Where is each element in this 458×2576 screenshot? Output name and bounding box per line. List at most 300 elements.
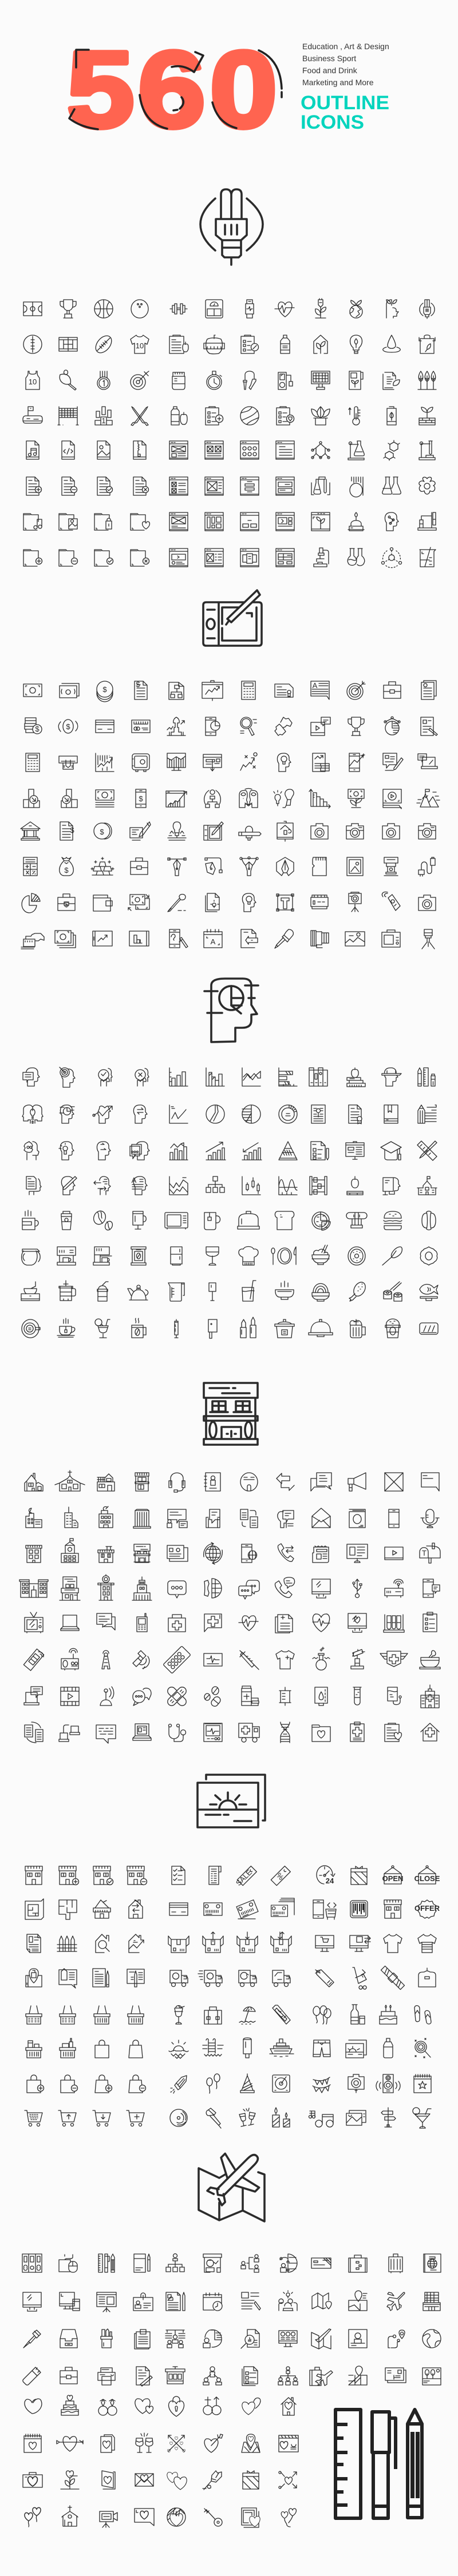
icon: open sign: OPEN — [382, 1874, 403, 1883]
icon: bowling ball — [131, 300, 148, 318]
icon: monitor chart — [167, 753, 185, 770]
icon: microscope — [314, 548, 329, 567]
icon: head network — [385, 512, 398, 531]
icon: document swap — [240, 1509, 258, 1528]
icon: soup bowl — [275, 1281, 294, 1299]
icon: text chat — [96, 1725, 116, 1743]
icon: credit card — [96, 720, 114, 733]
icon: org doc — [169, 682, 184, 699]
icon: luggage — [389, 2254, 402, 2273]
icon: clock school — [61, 1539, 78, 1563]
icon: doc cross — [133, 477, 149, 495]
icon: pen tool bezier — [240, 857, 258, 876]
icon: shop plus — [59, 1866, 79, 1885]
icon: stopwatch — [207, 371, 222, 389]
icon: head pencil — [382, 1068, 401, 1086]
icon: eco battery — [387, 407, 396, 425]
icon: heart pulse — [275, 302, 294, 317]
icon: head swap — [133, 1105, 147, 1123]
icon: kettle — [128, 1285, 148, 1300]
icon: lollipop — [415, 2038, 431, 2058]
icon: golf flag — [23, 407, 42, 423]
icon: flask — [313, 1647, 330, 1670]
icon: pyramid — [279, 1142, 297, 1160]
icon: suitcase plane — [310, 2367, 333, 2386]
icon: doc pen — [421, 717, 437, 736]
icon: magnifier — [240, 717, 256, 736]
icon: champagne glasses — [136, 2433, 153, 2452]
icon: beaker — [420, 547, 436, 567]
icon: scatter chart — [96, 753, 114, 772]
icon: pie nodes — [384, 717, 400, 735]
icon: test tube — [353, 1687, 361, 1705]
icon: podium — [95, 407, 112, 425]
icon: documents cycle — [25, 1722, 43, 1743]
icon: hotel — [423, 2292, 440, 2311]
icon: ping pong — [60, 370, 76, 390]
icon: wallet — [93, 895, 112, 911]
icon: binders — [22, 2254, 42, 2272]
icon: satellite — [133, 1651, 149, 1669]
icon: mortar — [420, 1651, 440, 1669]
icon: doc seal — [349, 1105, 362, 1124]
icon: team board — [165, 2330, 185, 2348]
icon: route — [388, 2330, 405, 2348]
icon: house — [25, 1473, 43, 1491]
icon: chat pen — [383, 753, 403, 770]
icon: trees — [418, 371, 436, 389]
icon: wine bottle — [351, 2005, 365, 2024]
outline icons heading: ICONS — [301, 112, 364, 133]
icon: head chat dots — [130, 1142, 149, 1160]
icon: document list — [242, 2367, 258, 2386]
icon: bars up — [23, 789, 40, 808]
icon: field — [23, 302, 42, 316]
icon: dolly — [353, 1967, 366, 1989]
icon: folder minus — [59, 550, 78, 566]
icon: pencil and ruler — [418, 1068, 435, 1086]
icon: percent tag: % — [275, 1871, 286, 1882]
icon: bars arrow up — [206, 1142, 226, 1160]
icon: router — [385, 1579, 403, 1597]
hero icon: shop building — [204, 1383, 258, 1445]
icon: iv cylinder — [279, 1687, 291, 1706]
black accent strokes on number — [69, 50, 282, 129]
icon: contract pen — [93, 1969, 109, 1987]
icon: web download — [203, 754, 222, 771]
icon: receipt — [209, 1866, 221, 1885]
icon: address book — [204, 1473, 220, 1491]
icon: jersey 10 — [131, 335, 149, 353]
icon: basket — [128, 2006, 144, 2024]
icon: syringe — [240, 1651, 259, 1669]
icon: eco device — [349, 371, 363, 389]
icon: document search — [241, 2329, 259, 2348]
icon: heart clipboard — [385, 1723, 401, 1742]
icon: drinks basket — [60, 2038, 76, 2058]
icon: two chats — [239, 1580, 259, 1599]
icon: clipboard shield — [277, 407, 294, 425]
icon: sauce bottles — [240, 1317, 256, 1338]
icon: cards — [271, 1898, 294, 1917]
icon: tea cup — [57, 1318, 75, 1337]
icon: line chart — [242, 1068, 260, 1086]
icon: wireframe — [205, 548, 223, 567]
icon: close sign — [414, 1866, 440, 1884]
icon: vinyl record — [170, 2109, 187, 2126]
icon: bottle — [281, 335, 290, 353]
icon: balloons — [313, 2006, 331, 2024]
icon: shop — [25, 1866, 42, 1885]
icon: board pen — [127, 1969, 144, 1987]
icon: love location — [242, 2434, 260, 2452]
icon: briefcase — [60, 2367, 77, 2384]
icon: signpost — [381, 2108, 396, 2127]
icon: thermometer — [349, 407, 360, 425]
icon: football — [93, 333, 114, 356]
icon: wireframe text — [276, 441, 294, 459]
icon: love chat — [135, 2509, 154, 2526]
icon: chicken leg — [349, 1280, 368, 1301]
icon: chess — [167, 717, 185, 736]
icon: certificate — [275, 684, 293, 697]
icon: falling apple — [350, 477, 363, 497]
icon: calculator — [242, 681, 255, 699]
icon: wireframe — [276, 512, 294, 531]
panel: business, design and photography icons — [21, 680, 440, 949]
icon: hospital — [421, 1685, 439, 1708]
icon: photos — [346, 2040, 366, 2058]
icon: invoice: $ — [70, 826, 74, 834]
icon: bridged flasks — [311, 477, 330, 495]
outline icons heading: OUTLINE — [301, 92, 389, 114]
icon: book — [384, 1105, 398, 1123]
icon: house growth — [129, 1934, 144, 1953]
icon: store — [384, 1900, 401, 1918]
icon: abacus — [310, 1176, 327, 1195]
icon: trophy — [60, 300, 76, 318]
icon: radio — [61, 1648, 78, 1670]
icon: easel — [277, 821, 293, 841]
icon: id badge — [133, 2293, 153, 2311]
icon: fish — [420, 1284, 438, 1301]
icon: offer badge — [414, 1900, 440, 1918]
icon: wireframe — [169, 441, 188, 459]
icon: dropper — [275, 929, 293, 948]
icon: basket — [26, 2006, 42, 2024]
panel: office and travel icons — [22, 2253, 441, 2527]
icon: hearts — [135, 2399, 153, 2414]
icon: landscape photo — [423, 2368, 441, 2385]
icon: monitor — [23, 2292, 41, 2311]
icon: sunset — [169, 2040, 188, 2058]
icon: monitor heart — [348, 1613, 366, 1632]
icon: flower — [419, 477, 435, 494]
icon: doc arrow — [241, 929, 258, 948]
icon: microscope — [351, 1649, 365, 1669]
icon: monitor cart — [315, 1935, 334, 1951]
icon: head board — [383, 1178, 400, 1195]
icon: wine glass — [206, 1247, 219, 1265]
icon: wireframe — [169, 548, 188, 567]
panel: marketing, charts, education and food icons — [21, 1067, 438, 1338]
icon: stat bars — [206, 1068, 224, 1086]
icon: clipboard — [423, 1612, 437, 1632]
icon: megaphone — [348, 1473, 366, 1491]
icon: skipping rope — [243, 371, 256, 389]
icon: tube stand — [419, 441, 435, 460]
icon: phone globe — [204, 1579, 222, 1598]
icon: wireframe — [240, 548, 259, 567]
icon: empire building — [132, 1577, 152, 1600]
icon: wedding rings — [98, 2399, 117, 2415]
icon: sale tag: SALE — [234, 1868, 254, 1887]
icon: money bag: $ — [64, 866, 69, 874]
icon: heart arrows — [279, 2471, 297, 2488]
pencil inner bars — [410, 2432, 420, 2498]
icon: cocktail — [175, 2005, 184, 2024]
icon: dish building — [26, 1508, 42, 1528]
icon: chat circles — [133, 1688, 151, 1706]
icon: bag minus — [61, 2075, 78, 2093]
icon: pie chart — [206, 1105, 224, 1123]
icon: ambulance — [239, 1723, 259, 1742]
category list: Business Sport — [302, 54, 356, 63]
icon: iv drip — [388, 1687, 401, 1705]
icon: chef hat — [239, 1247, 258, 1265]
icon: offer badge: OFFER — [414, 1904, 440, 1913]
icon: coffee grinder — [21, 1282, 40, 1301]
icon: storefront — [134, 1544, 150, 1563]
icon: portrait — [349, 2329, 367, 2348]
icon: sprout — [419, 407, 435, 425]
icon: scale — [206, 300, 223, 318]
icon: coin stack — [25, 718, 42, 734]
icon: two heads bulb — [22, 1105, 43, 1123]
icon: dollar cycle: $ — [66, 722, 70, 731]
icon: calendar clock — [203, 2293, 222, 2311]
icon: winged cross — [380, 1651, 408, 1667]
icon: cart plus — [127, 2110, 144, 2126]
icon: sd card — [313, 857, 326, 876]
icon: heart plant — [61, 2471, 79, 2489]
icon: devices — [60, 2292, 80, 2311]
icon: cart up — [58, 2110, 76, 2126]
icon: credit card — [169, 1903, 188, 1915]
icon: dashboard monitor — [279, 2331, 297, 2347]
icon: globe — [204, 1543, 222, 1564]
icon: bulb — [350, 335, 362, 353]
icon: bars arrow down — [242, 1143, 262, 1160]
icon: wireframe — [169, 477, 188, 495]
icon: round flasks — [348, 548, 365, 566]
icon: head message — [278, 1510, 294, 1528]
icon: plant plug — [315, 299, 326, 318]
icon: laptop chat — [24, 1687, 42, 1705]
icon: gender symbols — [203, 2397, 221, 2415]
icon: target darts — [131, 371, 149, 389]
icon: burger — [384, 1211, 402, 1230]
icon: radio tower — [102, 1651, 110, 1669]
icon: phone chat — [423, 1579, 440, 1597]
icon: shop check — [93, 1866, 113, 1885]
icon: monitor — [312, 1579, 330, 1598]
icon: pencil cup — [101, 2329, 112, 2348]
icon: globe heart — [167, 2508, 185, 2526]
hero icon: head with pie chart — [204, 979, 258, 1042]
icon: box up down — [271, 1932, 291, 1953]
icon: flask stand — [348, 441, 364, 460]
icon: usb stick — [23, 2367, 41, 2385]
icon: donut — [348, 1247, 365, 1265]
icon: basketball — [94, 300, 113, 318]
icon: steaming cup — [22, 1210, 38, 1230]
icon: balloons — [281, 2509, 296, 2527]
icon: medicine — [242, 1686, 259, 1706]
icon: books — [309, 1068, 327, 1086]
icon: medical doc — [275, 1615, 293, 1633]
icon: cake — [380, 2005, 397, 2024]
icon: apartments — [19, 1580, 48, 1597]
icon: rugby ball — [23, 335, 42, 353]
icon: heart house — [281, 2398, 296, 2415]
icon: doc gear — [206, 893, 219, 912]
icon: doc check — [97, 477, 112, 495]
icon: head gear — [24, 1142, 39, 1160]
icon: eco bag — [419, 335, 435, 353]
icon: monitor exchange — [350, 1935, 370, 1951]
icon: wireframe — [205, 441, 223, 459]
icon: folder check — [94, 550, 113, 566]
icon: dollar doc — [135, 680, 147, 699]
icon: head doc — [26, 1176, 41, 1195]
icon: cruise ship — [270, 2039, 294, 2057]
icon: popsicle — [243, 2038, 251, 2058]
icon: rice cooker — [275, 1319, 294, 1338]
category list — [302, 42, 389, 87]
icon: volleyball net — [58, 407, 78, 425]
icon: smart watch — [246, 300, 254, 318]
icon: medical clipboard — [350, 1722, 364, 1742]
icon: pizza — [312, 1212, 330, 1230]
icon: dollar briefcase: $ — [64, 900, 69, 909]
icon: presentation board — [202, 681, 223, 701]
icon: box up — [203, 1932, 223, 1953]
icon: bulb growth — [168, 822, 186, 840]
icon: blueprint — [25, 1899, 44, 1919]
icon: horizontal bars — [279, 1068, 297, 1086]
icon: presenter — [203, 2254, 222, 2272]
icon: satellite building — [99, 1506, 113, 1528]
icon: heart lock — [169, 2396, 184, 2416]
icon: dumbbell — [170, 304, 187, 314]
icon: dollar cycle — [58, 719, 78, 733]
icon: map pin — [312, 2293, 331, 2309]
icon: phone draw — [169, 929, 188, 948]
icon: camera — [382, 824, 400, 839]
icon: computer mouse — [59, 2255, 77, 2272]
icon: head arrows — [94, 1176, 110, 1195]
icon: full basket — [26, 2041, 42, 2058]
icon: house exchange — [129, 1900, 143, 1918]
icon: feather spoon — [382, 1247, 402, 1265]
icon: coffee maker — [93, 1247, 112, 1265]
icon: usb cable — [418, 857, 435, 876]
icon: coffee top view — [22, 1319, 40, 1338]
icon: love envelope — [135, 2474, 153, 2486]
icon: sandwich — [346, 1213, 367, 1228]
icon: sprout chamber — [311, 512, 330, 531]
icon: tray — [420, 1323, 438, 1334]
icon: head check — [98, 1068, 112, 1086]
icon: medical monitor — [204, 1723, 222, 1742]
icon: gift — [351, 1866, 367, 1885]
icon: dome — [238, 1211, 259, 1229]
icon: phone globe — [242, 1544, 256, 1563]
icon: love photos — [242, 2508, 260, 2527]
icon: bars trend — [169, 1143, 188, 1160]
icon: returns truck — [239, 1970, 256, 1987]
icon: team branch — [241, 2255, 259, 2272]
icon: greeting card — [102, 2471, 115, 2489]
icon: clipboard plus — [206, 407, 223, 425]
icon: cart grid — [25, 2110, 42, 2126]
icon: calculator signs — [23, 857, 37, 876]
icon: swap arrows — [277, 1473, 294, 1490]
icon: rice bowl — [312, 1245, 329, 1265]
icon: hot dog — [422, 1211, 436, 1230]
icon: mobile — [137, 1613, 147, 1632]
icon: shorts — [313, 2040, 330, 2057]
icon: bunting — [313, 2077, 330, 2093]
icon: doc minus — [62, 477, 77, 495]
icon: percent tag — [271, 1866, 290, 1886]
icon: dollar doc: $ — [136, 680, 140, 689]
icon: fried egg — [420, 1247, 437, 1265]
icon: laptop chat — [418, 754, 437, 769]
icon: trophy — [348, 717, 364, 736]
icon: half pie — [242, 1105, 260, 1123]
icon: fridge — [171, 1247, 182, 1265]
hero icon: power plug — [200, 189, 263, 265]
icon: head text — [132, 1176, 147, 1195]
icon: molecule — [311, 442, 330, 459]
icon: medical folder — [312, 1725, 330, 1742]
icon: basket — [60, 2006, 76, 2024]
icon: dollar briefcase — [58, 894, 75, 911]
icon: phone pie — [206, 717, 220, 736]
icon: rolling pin — [175, 1319, 178, 1338]
icon: flip flops — [414, 2006, 431, 2024]
icon: sunscreen — [273, 2005, 290, 2024]
icon: network head — [280, 2254, 297, 2272]
icon: dial — [279, 1105, 297, 1123]
icon: 24 hours: 24 — [326, 1877, 334, 1885]
icon: microphone — [421, 1509, 439, 1528]
icon: map plane — [311, 2329, 331, 2349]
icon: close sign: CLOSE — [414, 1874, 440, 1883]
icon: beer — [350, 1319, 365, 1338]
icon: party hat — [240, 2074, 254, 2093]
icon: fast delivery — [198, 1970, 222, 1987]
icon: camera flash — [384, 857, 398, 876]
icon: head idea — [59, 1142, 74, 1160]
icon: bar chart — [169, 1068, 188, 1086]
icon: cash plant — [348, 789, 364, 808]
icon: tv — [25, 1612, 43, 1633]
icon: phone message — [275, 1577, 295, 1597]
icon: beach umbrella — [239, 2007, 255, 2024]
